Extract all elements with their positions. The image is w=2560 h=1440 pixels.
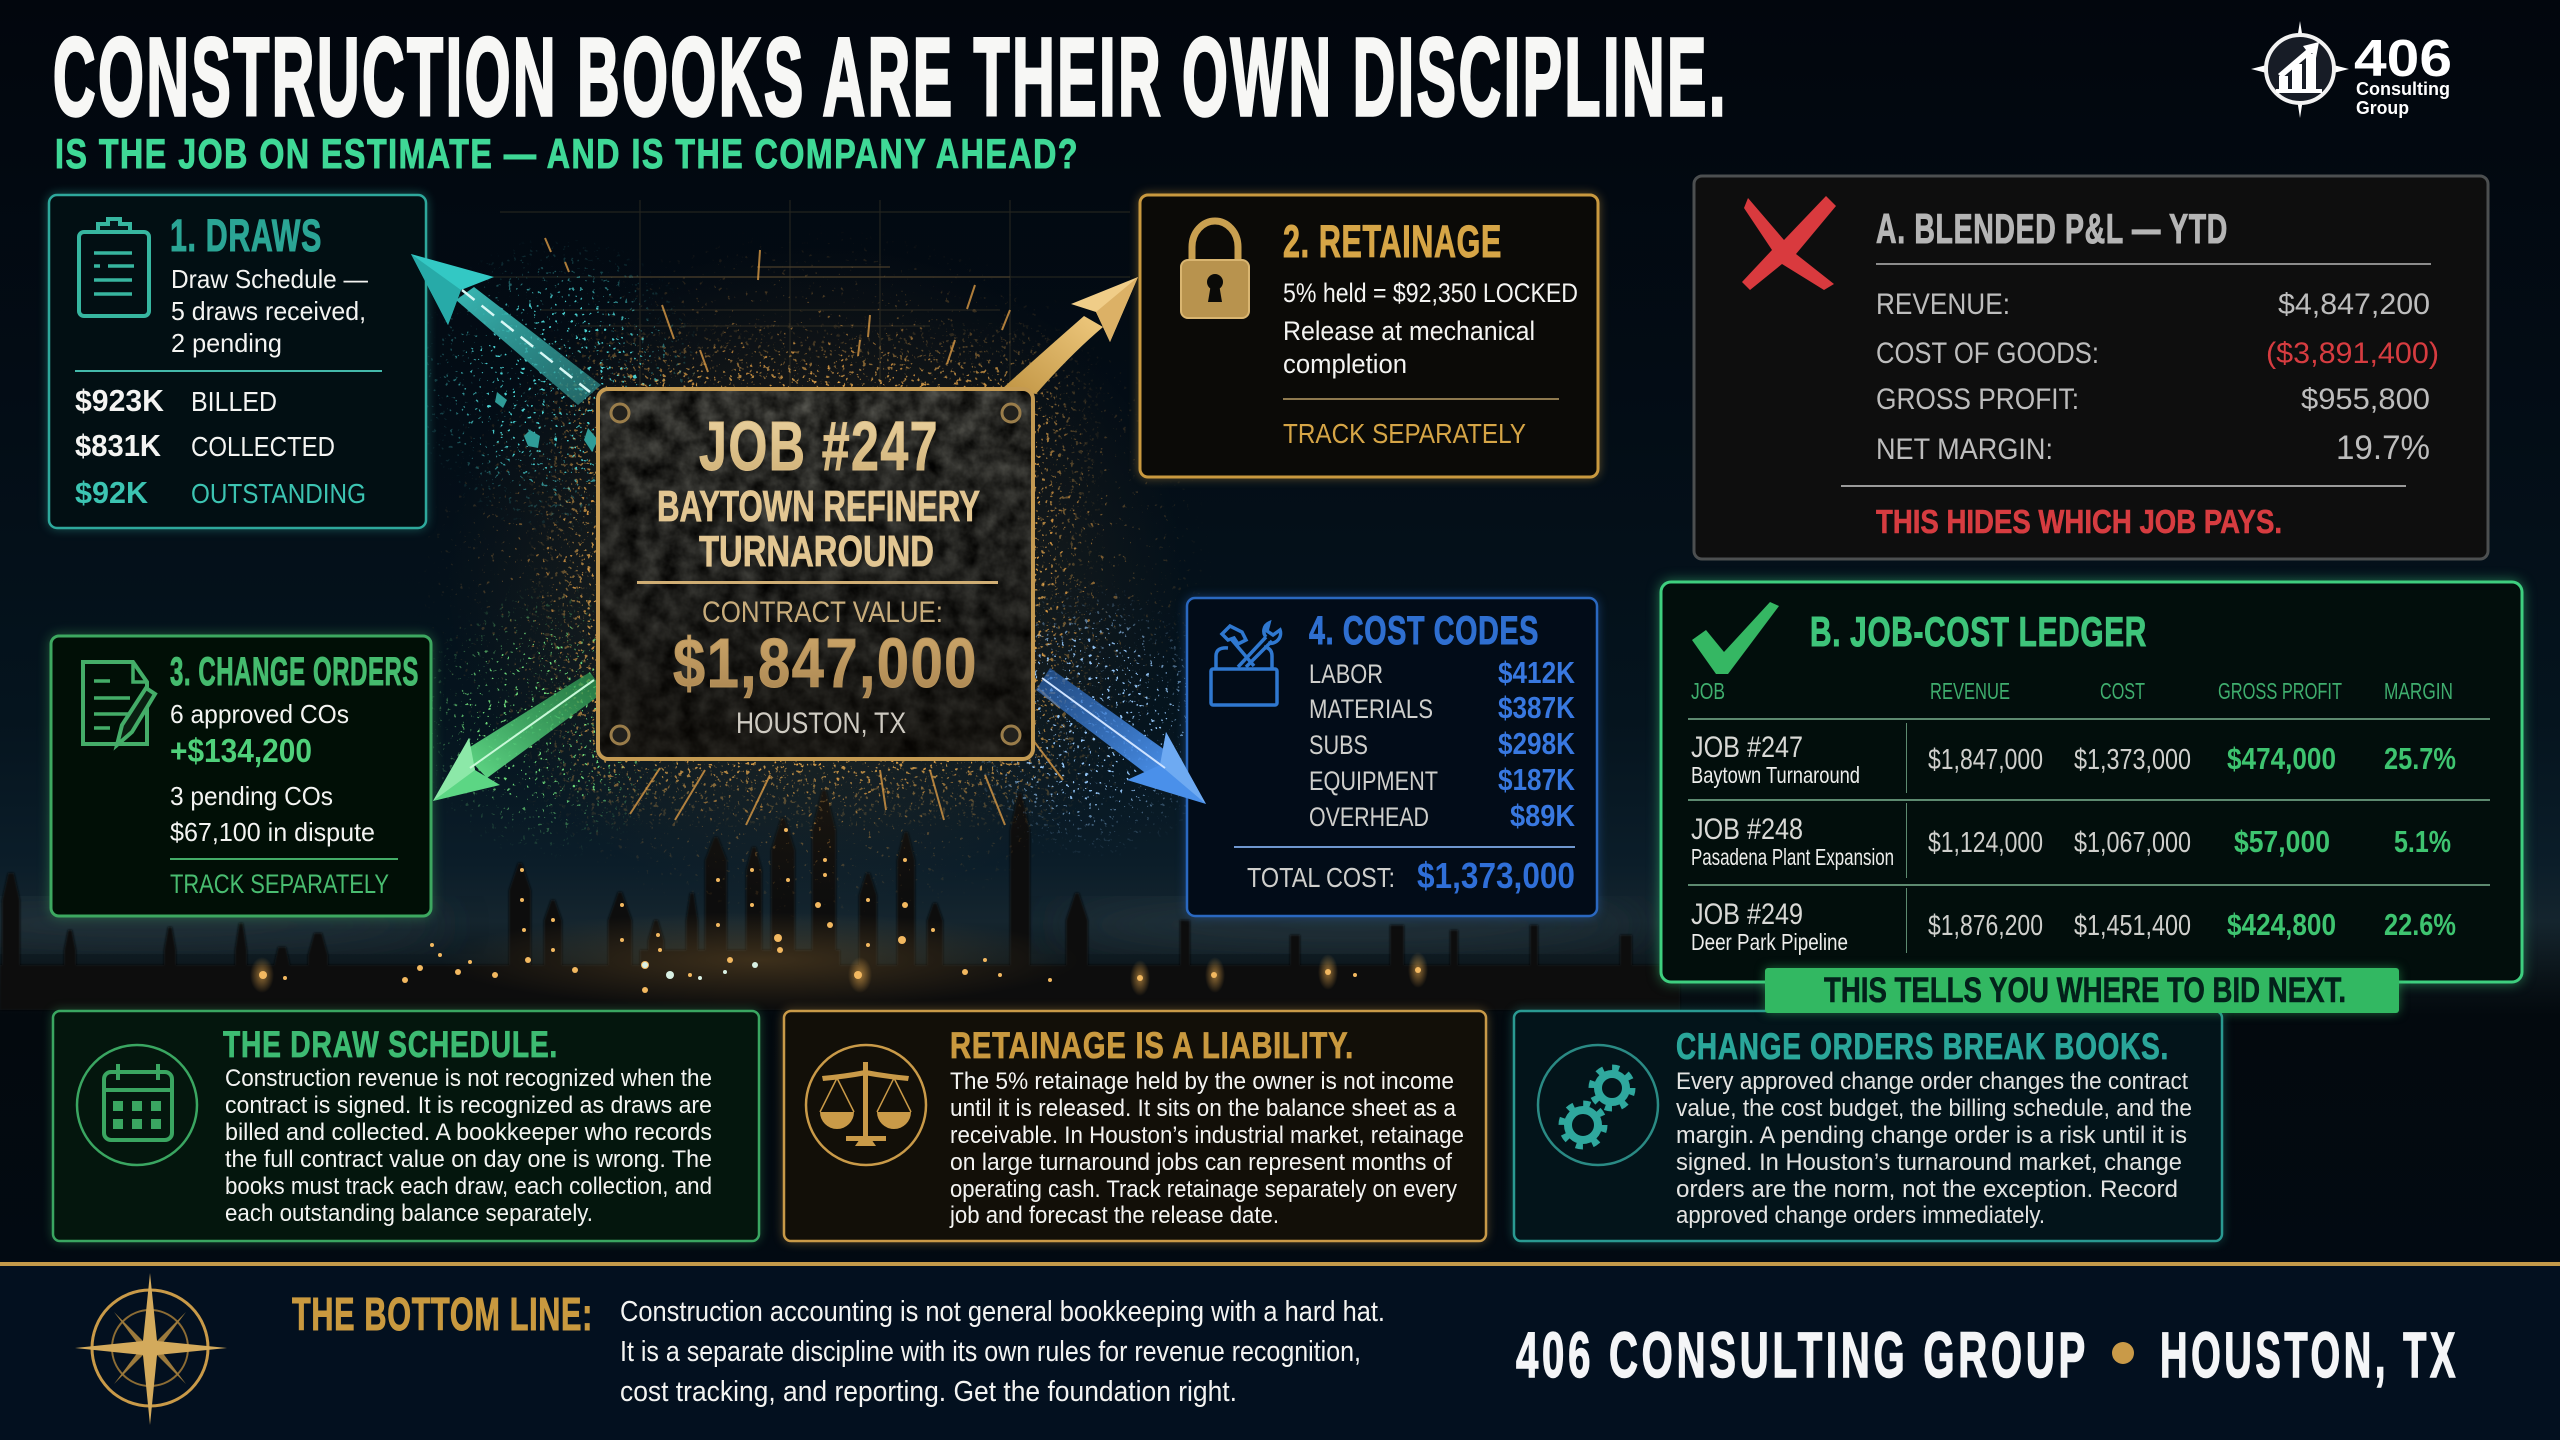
faint grid lines (440, 200, 1130, 460)
P&L rows: $4,847,200 (2278, 288, 2430, 321)
retainage note: TRACK SEPARATELY (1283, 418, 1526, 449)
bottom line text (620, 1296, 1385, 1408)
body: change orders break books: signed. In Houston’s turnaround market, change (1676, 1149, 2182, 1176)
change orders details: 6 approved COs (170, 699, 349, 729)
teal debris (495, 392, 610, 462)
cost code values: $387K (1498, 690, 1576, 725)
plate contract value: $1,847,000 (673, 624, 978, 702)
ledger header row: MARGIN (2384, 678, 2453, 704)
P&L rows: $955,800 (2301, 383, 2430, 416)
cost code values: $412K (1498, 655, 1576, 690)
ledger row: job 248: Pasadena Plant Expansion (1691, 844, 1894, 870)
cost code values: $298K (1498, 726, 1576, 761)
body: the draw schedule: Construction revenue is not recognized when the (225, 1065, 712, 1092)
P&L rows: REVENUE: (1876, 288, 2010, 321)
body: retainage is a liability: operating cash. Track retainage separately on every (950, 1176, 1457, 1203)
total cost: $1,373,000 (1417, 855, 1575, 896)
draws figures (75, 383, 366, 510)
cost code values: $89K (1510, 798, 1576, 833)
icon: document with pencil (83, 662, 155, 745)
ledger row: job 248 (1691, 813, 2451, 870)
draws figures: OUTSTANDING (191, 478, 366, 509)
plate job name (657, 482, 980, 576)
body: the draw schedule: books must track each draw, each collection, and (225, 1173, 712, 1200)
arrow: cost codes (1036, 668, 1206, 804)
change orders details: $67,100 in dispute (170, 817, 375, 847)
ledger header row (1691, 678, 2453, 704)
plate rivets (611, 404, 1020, 744)
P&L warning: THIS HIDES WHICH JOB PAYS. (1876, 503, 2282, 540)
body: change orders break books: margin. A pending change order is a risk until it is (1676, 1122, 2187, 1149)
body: retainage is a liability: The 5% retainage held by the owner is not income (950, 1068, 1454, 1095)
icon: clipboard (79, 219, 149, 316)
body: retainage is a liability: on large turnaround jobs can represent months of (950, 1149, 1452, 1176)
P&L rows: NET MARGIN: (1876, 433, 2053, 466)
panel: 3 change orders (51, 636, 431, 916)
P&L rows (1876, 288, 2439, 467)
bottom line label: THE BOTTOM LINE: (292, 1288, 593, 1340)
panel: change orders break books (1514, 1011, 2222, 1241)
central job plate (598, 389, 1033, 759)
heading: change orders: 3. CHANGE ORDERS (170, 650, 419, 694)
P&L rows: GROSS PROFIT: (1876, 383, 2079, 416)
heading: ledger: B. JOB-COST LEDGER (1810, 608, 2147, 655)
total cost: TOTAL COST: (1247, 862, 1395, 893)
ledger row: job 249 (1691, 898, 2456, 955)
heading: retainage: 2. RETAINAGE (1283, 216, 1502, 267)
center glow and sparks (427, 238, 1202, 908)
cost code labels: OVERHEAD (1309, 802, 1429, 832)
ledger row: job 249: 22.6% (2384, 907, 2456, 942)
ledger row: job 248: $1,067,000 (2074, 827, 2191, 859)
arrow: draws (411, 254, 610, 462)
draws description: 5 draws received, (171, 296, 366, 326)
ledger row: job 248: JOB #248 (1691, 813, 1803, 846)
draws description: Draw Schedule — (171, 264, 368, 294)
P&L rows: COST OF GOODS: (1876, 337, 2099, 370)
retainage description (1283, 278, 1578, 379)
body: the draw schedule: contract is signed. It is recognized as draws are (225, 1092, 712, 1119)
logo wordmark: Group (2356, 98, 2409, 118)
cost code labels (1309, 659, 1438, 832)
P&L rows: ($3,891,400) (2266, 337, 2439, 370)
heading: cost codes: 4. COST CODES (1309, 609, 1539, 653)
bottom line text: Construction accounting is not general bookkeeping with a hard hat. (620, 1296, 1385, 1328)
body: change orders break books: approved change orders immediately. (1676, 1202, 2045, 1229)
body: change orders break books: value, the cost budget, the billing schedule, and the (1676, 1095, 2192, 1122)
cost code labels: EQUIPMENT (1309, 766, 1438, 796)
body: the draw schedule: the full contract value on day one is wrong. The (225, 1146, 712, 1173)
change orders details: +$134,200 (170, 732, 312, 769)
ledger row: job 247: $474,000 (2227, 741, 2336, 776)
icon: green check (1692, 602, 1779, 674)
cost code labels: LABOR (1309, 659, 1383, 689)
body: the draw schedule: billed and collected. A bookkeeper who records (225, 1119, 712, 1146)
body: retainage is a liability: job and forecast the release date. (949, 1202, 1279, 1229)
cost code labels: MATERIALS (1309, 694, 1433, 724)
draws description (171, 264, 368, 358)
ledger row: job 247: 25.7% (2384, 741, 2456, 776)
body: the draw schedule (225, 1065, 712, 1227)
draws figures: $831K (75, 428, 162, 463)
retainage description: Release at mechanical (1283, 316, 1535, 346)
panel: B job-cost ledger (1661, 582, 2522, 982)
plate job number: JOB #247 (699, 407, 939, 485)
logo wordmark: Consulting (2356, 79, 2450, 99)
callout: where to bid next: THIS TELLS YOU WHERE TO BID NEXT. (1824, 971, 2346, 1010)
ledger row: job 247 (1691, 731, 2456, 788)
ledger row: job 247: $1,373,000 (2074, 744, 2191, 776)
bottom line text: cost tracking, and reporting. Get the foundation right. (620, 1376, 1237, 1408)
bottom line text: It is a separate discipline with its own rules for revenue recognition, (620, 1336, 1361, 1368)
cost code values (1498, 655, 1576, 833)
panel: 4 cost codes (1187, 598, 1597, 916)
total cost (1247, 855, 1575, 896)
plate job name: BAYTOWN REFINERY (657, 482, 980, 531)
icon: gold compass (75, 1273, 227, 1425)
icon: red X (1742, 196, 1836, 290)
ledger row: job 249: Deer Park Pipeline (1691, 929, 1848, 955)
cost code values: $187K (1498, 762, 1576, 797)
ledger row: job 247: $1,847,000 (1928, 744, 2043, 776)
arrow: retainage (1003, 277, 1138, 394)
ledger row: job 248: $1,124,000 (1928, 827, 2043, 859)
icon: gears (1538, 1045, 1658, 1165)
draws figures: BILLED (191, 386, 277, 417)
ledger row: job 248: $57,000 (2234, 824, 2330, 859)
change orders details (170, 699, 375, 847)
plate location: HOUSTON, TX (736, 707, 906, 740)
body: retainage is a liability (949, 1068, 1464, 1229)
ledger header row: JOB (1691, 678, 1725, 704)
arrow: change orders (433, 672, 604, 801)
icon: padlock (1181, 221, 1249, 318)
draws figures: $923K (75, 383, 165, 418)
panel: retainage is a liability (784, 1011, 1486, 1241)
draws description: 2 pending (171, 328, 282, 358)
retainage description: completion (1283, 349, 1407, 379)
body: change orders break books (1676, 1068, 2192, 1229)
ledger row: job 249: $1,876,200 (1928, 910, 2043, 942)
logo compass mark (2251, 21, 2349, 118)
ledger row: job 247: Baytown Turnaround (1691, 762, 1860, 788)
change orders note: TRACK SEPARATELY (170, 869, 389, 899)
firm and location: 406 CONSULTING GROUP (1516, 1319, 2089, 1391)
ledger row: job 249: JOB #249 (1691, 898, 1803, 931)
ledger row: job 249: $1,451,400 (2074, 910, 2191, 942)
panel: the draw schedule (53, 1011, 759, 1241)
logo wordmark: 406 (2354, 30, 2452, 88)
change orders details: 3 pending COs (170, 781, 333, 811)
refinery skyline (0, 790, 1680, 1010)
body: the draw schedule: each outstanding balance separately. (225, 1200, 593, 1227)
retainage description: 5% held = $92,350 LOCKED (1283, 278, 1578, 308)
logo wordmark (2354, 30, 2452, 118)
ledger header row: REVENUE (1930, 678, 2010, 704)
icon: calendar (77, 1045, 197, 1165)
ledger row: job 247: JOB #247 (1691, 731, 1803, 764)
icon: scales (806, 1045, 926, 1165)
body: change orders break books: Every approved change order changes the contract (1676, 1068, 2188, 1095)
heading: the draw schedule: THE DRAW SCHEDULE. (223, 1024, 558, 1065)
plate contract label: CONTRACT VALUE: (702, 596, 943, 629)
panel: A blended P&L (1694, 176, 2488, 559)
cost code labels: SUBS (1309, 730, 1368, 760)
refinery lights (250, 828, 1428, 1008)
ledger row: job 248: 5.1% (2394, 824, 2451, 859)
heading: blended P&L: A. BLENDED P&L — YTD (1876, 205, 2228, 252)
footer band (0, 1262, 2560, 1440)
body: retainage is a liability: until it is released. It sits on the balance sheet as a (950, 1095, 1457, 1122)
ledger row: job 249: $424,800 (2227, 907, 2336, 942)
draws figures: $92K (75, 475, 149, 510)
draws figures: COLLECTED (191, 431, 335, 462)
icon: tools and toolbox (1211, 623, 1281, 705)
plate job name: TURNAROUND (699, 527, 934, 576)
body: retainage is a liability: receivable. In Houston’s industrial market, retainage (950, 1122, 1464, 1149)
logo: 406 Consulting Group (2251, 21, 2452, 118)
body: change orders break books: orders are the norm, not the exception. Record (1676, 1176, 2178, 1203)
ledger header row: COST (2100, 678, 2145, 704)
heading: draws: 1. DRAWS (170, 210, 322, 261)
heading: change orders break books: CHANGE ORDERS BREAK BOOKS. (1676, 1026, 2169, 1067)
P&L rows: 19.7% (2336, 429, 2430, 467)
panel: 2 retainage (1140, 195, 1598, 477)
heading: retainage is a liability: RETAINAGE IS A LIABILITY. (950, 1025, 1354, 1066)
ledger header row: GROSS PROFIT (2218, 678, 2342, 704)
panel: 1 draws (49, 195, 426, 528)
subtitle: IS THE JOB ON ESTIMATE — AND IS THE COMPANY AHEAD? (55, 130, 1079, 177)
